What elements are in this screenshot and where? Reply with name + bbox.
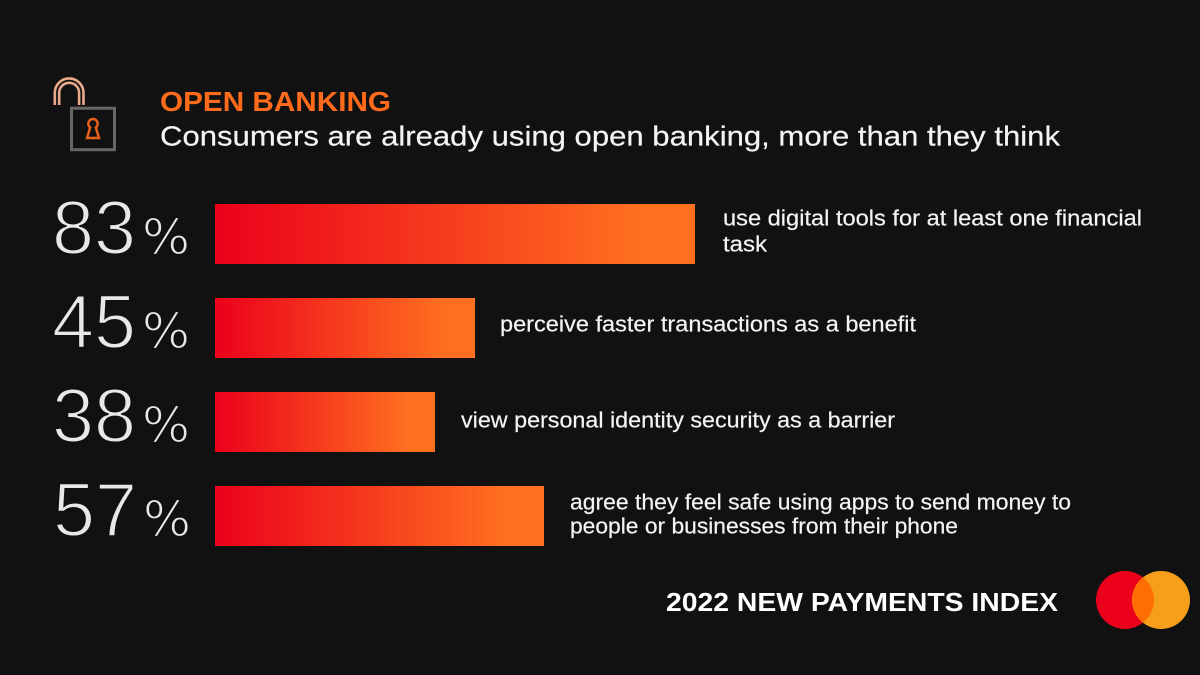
icon: open padlock — [57, 81, 114, 150]
subheading: Consumers are already using open banking, more than they think — [160, 120, 1061, 152]
stat row: 83%: task — [723, 232, 768, 256]
stat row: 83% — [52, 186, 1142, 271]
stat row: 45% — [52, 280, 916, 365]
heading: OPEN BANKING — [160, 86, 391, 117]
stat row: 38% — [52, 374, 895, 459]
stat row: 57%: people or businesses from their phone — [570, 514, 958, 538]
stat row: 83%: use digital tools for at least one financial — [723, 206, 1142, 230]
stat row: 57%: 57 — [53, 468, 137, 553]
stat row: 83%: % — [142, 209, 190, 266]
stat row: 57%: agree they feel safe using apps to send money to — [570, 490, 1071, 514]
stat row: 38%: % — [142, 397, 190, 454]
stat row: 45%: perceive faster transactions as a benefit — [500, 312, 916, 336]
stat row: 57%: % — [143, 491, 191, 548]
stat row: 83%: 83 — [52, 186, 136, 271]
stat row: 38%: view personal identity security as a barrier — [461, 408, 895, 432]
stat row: 45%: 45 — [52, 280, 136, 365]
footer label: 2022 NEW PAYMENTS INDEX — [666, 587, 1059, 617]
stat row: 45%: % — [142, 303, 190, 360]
logo: overlapping circles — [1096, 571, 1190, 629]
stat row: 57% — [53, 468, 1071, 553]
stat row: 38%: 38 — [52, 374, 136, 459]
